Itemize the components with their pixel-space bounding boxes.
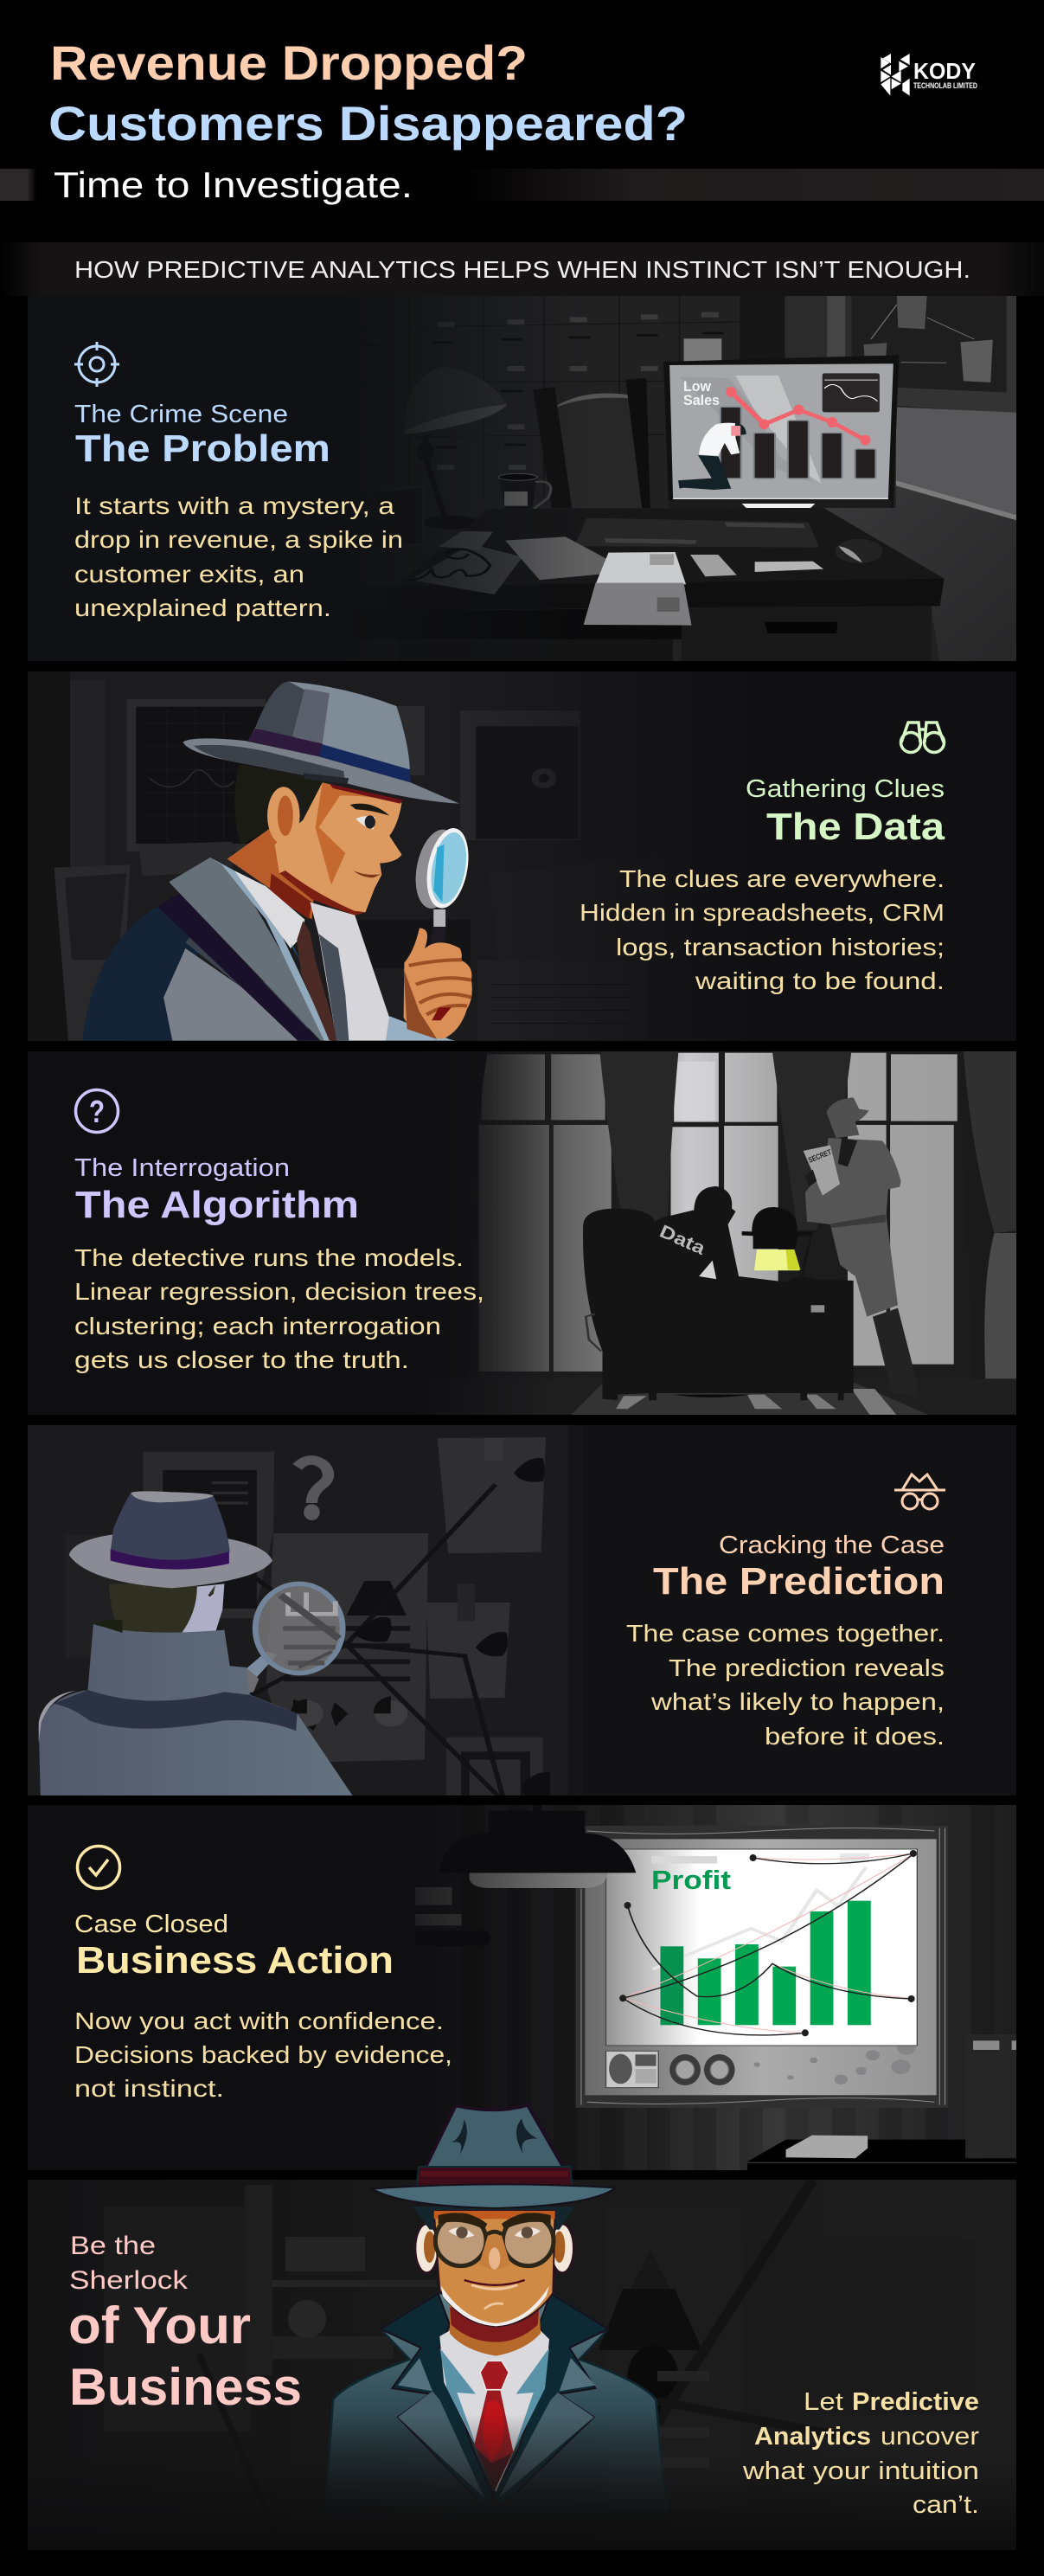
body text <box>626 1620 945 1750</box>
chart label: Profit <box>651 1865 731 1895</box>
neck <box>450 2302 541 2356</box>
subtitle: Time to Investigate. <box>54 164 413 205</box>
monitor <box>663 355 899 518</box>
body text: The case comes together. <box>626 1620 945 1647</box>
body text: It starts with a mystery, a <box>74 492 394 519</box>
body text <box>580 865 945 994</box>
label on back: Data <box>657 1222 708 1259</box>
body text: what’s likely to happen, <box>650 1688 945 1715</box>
hat <box>183 682 459 804</box>
shirt <box>439 2330 549 2492</box>
background: faded evidence wall <box>104 2180 976 2535</box>
desk lamp <box>404 367 508 530</box>
header <box>0 35 1044 205</box>
logo: Kody Technolab: TECHNOLAB LIMITED <box>913 81 977 90</box>
window panes <box>479 1053 958 1372</box>
closing text: Predictive <box>852 2388 979 2416</box>
papers and phone <box>411 544 522 594</box>
tagline band: HOW PREDICTIVE ANALYTICS HELPS WHEN INSTINCT ISN’T ENOUGH. <box>74 256 970 283</box>
tagline band <box>0 242 1044 296</box>
hair <box>413 2207 575 2230</box>
body text: gets us closer to the truth. <box>74 1346 409 1373</box>
title line 2: Customers Disappeared? <box>48 96 688 151</box>
heading: The Prediction <box>653 1560 945 1603</box>
eyebrow: Cracking the Case <box>719 1532 945 1559</box>
floor <box>415 1378 1021 1416</box>
icon: question mark <box>76 1090 118 1132</box>
face <box>275 782 402 915</box>
neck <box>227 829 316 920</box>
hair and hand <box>109 1584 197 1635</box>
body text <box>74 492 403 621</box>
tie <box>297 921 338 1041</box>
pins <box>354 1458 550 1797</box>
fingerprint card <box>606 2051 658 2088</box>
body text: The detective runs the models. <box>74 1244 464 1271</box>
secret folder label: SECRET <box>807 1147 833 1165</box>
body text: Hidden in spreadsheets, CRM <box>580 899 945 926</box>
tape rolls <box>669 2054 701 2085</box>
cork board notes <box>863 296 993 382</box>
eyebrow: The Interrogation <box>74 1154 290 1182</box>
body text: Decisions backed by evidence, <box>74 2041 452 2068</box>
hat <box>69 1491 272 1588</box>
body text: logs, transaction histories; <box>616 934 945 960</box>
closing text: Analytics <box>754 2423 871 2451</box>
closing text: can’t. <box>913 2491 979 2519</box>
chart paper <box>606 1849 917 2046</box>
pinned documents <box>144 1452 274 1618</box>
coat <box>247 1667 259 1693</box>
ear <box>267 787 300 845</box>
body text: not instinct. <box>74 2075 224 2102</box>
heading: The Problem <box>75 427 330 470</box>
icon: check circle <box>78 1847 119 1888</box>
icon: binoculars <box>901 723 945 753</box>
brows <box>439 2213 551 2230</box>
heading: Business Action <box>76 1939 394 1982</box>
coffee mug <box>498 472 552 509</box>
side cabinet <box>965 2034 1021 2158</box>
title line 1: Revenue Dropped? <box>50 35 528 90</box>
magnifier <box>415 828 469 945</box>
tie <box>474 2361 513 2490</box>
closing text: what your intuition <box>742 2457 979 2485</box>
body text: Now you act with confidence. <box>74 2007 444 2034</box>
body text <box>74 2007 452 2102</box>
call-to-action lead: Be the <box>70 2232 156 2260</box>
ceiling lamp <box>439 1805 636 1888</box>
table and book <box>747 2140 1021 2172</box>
icon: target <box>74 342 119 387</box>
body text <box>74 1244 484 1373</box>
trench coat figure <box>804 1097 917 1395</box>
illustration: crime scene desk with low sales monitor <box>346 296 1021 663</box>
shelf books <box>415 1887 452 1905</box>
magnifying glass <box>245 1584 343 1679</box>
body text: The clues are everywhere. <box>619 865 945 892</box>
mouse <box>836 539 882 563</box>
hat <box>372 2105 616 2208</box>
body <box>82 907 202 1041</box>
hand <box>404 928 472 1039</box>
nose <box>479 2235 510 2269</box>
heading: The Data <box>766 806 945 848</box>
dark silhouettes <box>583 1186 854 1400</box>
body text: unexplained pattern. <box>74 594 331 621</box>
string lines <box>252 1484 503 1797</box>
panel: the problem <box>28 296 1021 663</box>
icon: spy hat and glasses <box>894 1474 945 1509</box>
closing text: uncover <box>881 2423 979 2451</box>
panel: the prediction <box>26 1425 1016 1797</box>
chart marks <box>346 1581 407 1616</box>
illustration: silhouettes at the window <box>415 1051 1021 1416</box>
coat <box>324 2293 668 2527</box>
illustration: detective with magnifying glass <box>82 682 474 1041</box>
panel: business action <box>28 1805 1021 2172</box>
logo: Kody Technolab: KODY <box>913 58 976 84</box>
photo frame <box>422 519 424 525</box>
man kneeling <box>699 423 740 456</box>
brow and eye <box>350 804 389 816</box>
body text: drop in revenue, a spike in <box>74 526 403 553</box>
lapel <box>169 858 333 1041</box>
mouth <box>464 2280 525 2285</box>
body text: customer exits, an <box>74 561 304 588</box>
monitor label: Sales <box>683 392 720 408</box>
shirt <box>234 870 304 948</box>
hair <box>234 764 323 845</box>
cuff <box>386 1016 455 1041</box>
illustration: detective at the evidence wall <box>26 1425 583 1797</box>
coat collar <box>381 2294 493 2507</box>
body text: clustering; each interrogation <box>74 1313 441 1339</box>
closing text <box>742 2388 979 2519</box>
call-to-action lead: Sherlock <box>69 2266 189 2295</box>
logo: Kody Technolab <box>881 54 977 96</box>
eyebrow: Case Closed <box>74 1911 228 1938</box>
ears <box>415 2224 439 2273</box>
background: evidence board <box>54 671 615 1040</box>
illustration: detective with glasses <box>324 2105 668 2527</box>
question mark <box>298 1460 329 1503</box>
panel: the data <box>26 671 1016 1041</box>
eyebrow: Gathering Clues <box>746 775 945 803</box>
monitor label: Low <box>683 378 712 395</box>
illustration: evidence board with profit chart <box>415 1805 1021 2172</box>
desk <box>413 508 945 661</box>
call-to-action heading: Business <box>69 2358 302 2416</box>
curtains <box>415 1051 488 1397</box>
body text: Linear regression, decision trees, <box>74 1278 484 1305</box>
board frame <box>575 1826 948 2108</box>
closing text: Let <box>804 2388 843 2416</box>
face <box>434 2211 555 2326</box>
eyebrow: The Crime Scene <box>74 401 288 428</box>
heading: The Algorithm <box>75 1184 359 1226</box>
call-to-action heading: of Your <box>68 2297 251 2354</box>
icon: question mark: ? <box>89 1094 105 1129</box>
body text: The prediction reveals <box>669 1654 945 1681</box>
body text: before it does. <box>765 1723 945 1750</box>
panel: closing call to action <box>28 2180 1016 2550</box>
glasses <box>435 2215 554 2266</box>
chair back <box>533 378 650 508</box>
body text: waiting to be found. <box>695 967 945 994</box>
panel: the algorithm <box>28 1051 1021 1416</box>
